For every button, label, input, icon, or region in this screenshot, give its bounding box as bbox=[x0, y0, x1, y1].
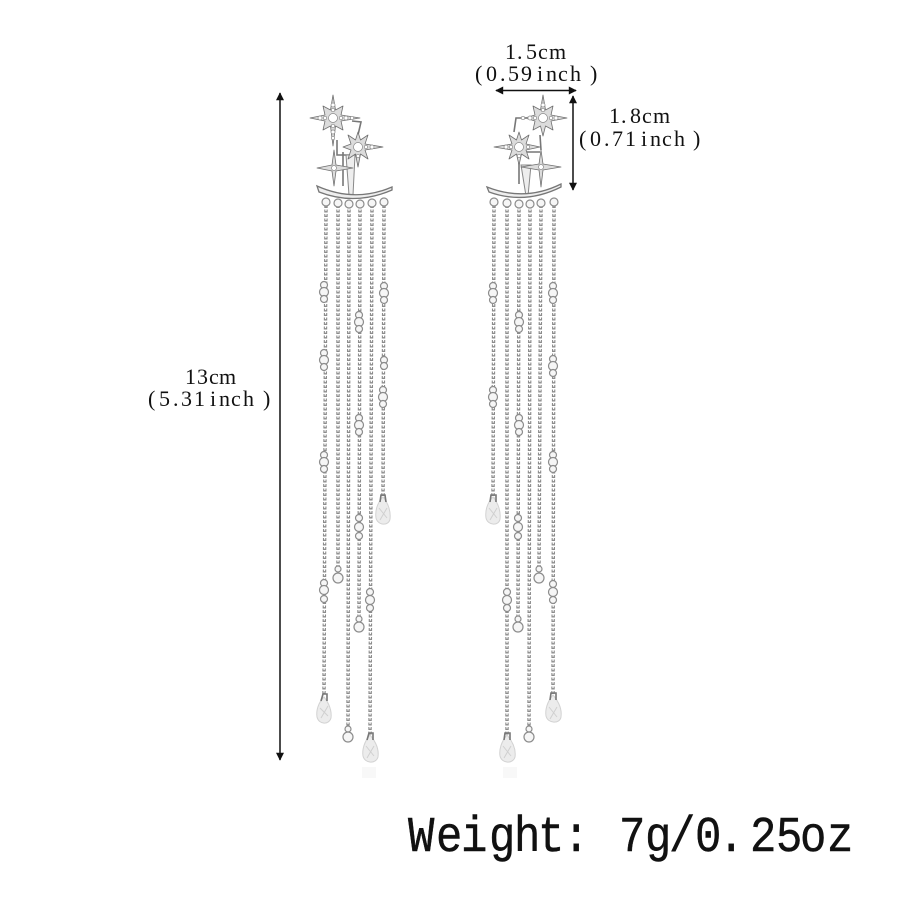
right earring beads bbox=[488, 282, 558, 742]
width arrow bbox=[496, 90, 576, 92]
left earring curved bar bbox=[317, 186, 392, 199]
left earring beads bbox=[320, 282, 388, 742]
total length label: (5.31inch) bbox=[148, 386, 270, 411]
right earring crystal drops bbox=[486, 495, 561, 778]
total length label bbox=[148, 364, 270, 411]
height arrow bbox=[572, 96, 574, 190]
left earring bbox=[310, 95, 392, 778]
left earring stud: stars bbox=[310, 95, 383, 195]
total length arrow bbox=[279, 93, 281, 760]
total length label: 13cm bbox=[185, 364, 236, 389]
width label: (0.59inch) bbox=[475, 61, 597, 86]
weight label: Weight: 7g/0.25oz bbox=[408, 811, 853, 867]
height label: 1.8cm bbox=[609, 103, 670, 128]
left earring chains bbox=[322, 198, 388, 735]
width label bbox=[475, 39, 597, 86]
right earring curved bar bbox=[487, 184, 561, 197]
right earring chains bbox=[490, 198, 558, 735]
height label bbox=[579, 103, 700, 151]
right earring bbox=[486, 95, 567, 778]
right earring stud: stars bbox=[494, 95, 567, 196]
left earring crystal drops bbox=[317, 495, 390, 778]
width label: 1.5cm bbox=[505, 39, 566, 64]
height label: (0.71inch) bbox=[579, 126, 700, 151]
